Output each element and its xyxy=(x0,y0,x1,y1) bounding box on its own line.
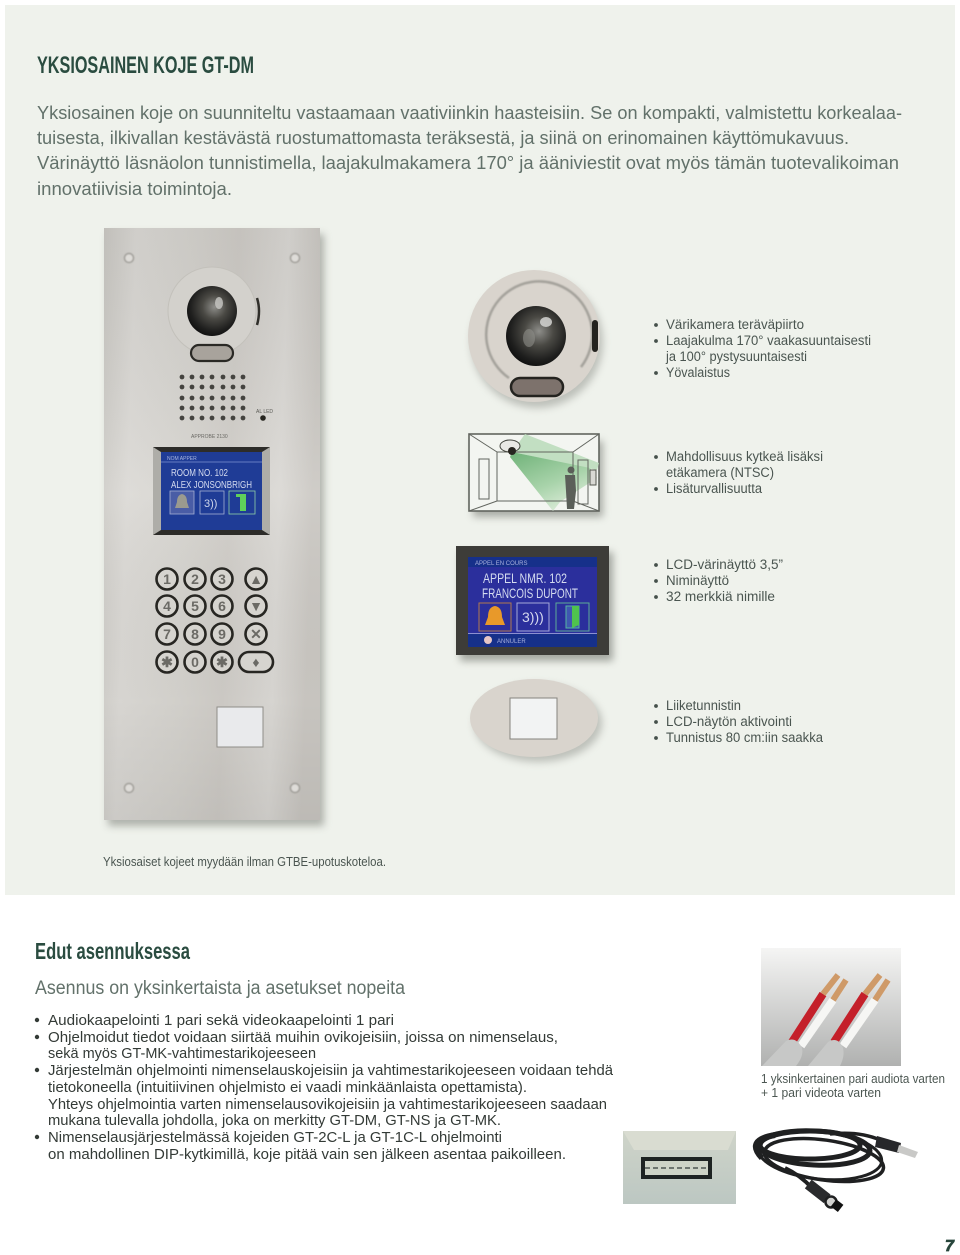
keypad labels: 5 xyxy=(191,598,199,614)
keypad labels xyxy=(161,571,263,670)
keypad labels: ♦ xyxy=(252,654,260,670)
installation heading: Edut asennuksessa xyxy=(35,938,190,964)
door station illustration xyxy=(104,228,324,826)
installation bullet list: Järjestelmän ohjelmointi nimenselauskojeisiin ja vahtimestarikojeeseen voidaan tehdä xyxy=(48,1063,614,1079)
keypad labels: 9 xyxy=(218,626,226,642)
LCD close-up: APPEL EN COURS xyxy=(475,561,527,567)
feature list: camera xyxy=(654,317,871,380)
keypad labels: 2 xyxy=(191,571,199,587)
installation bullet list xyxy=(35,1013,614,1163)
keypad labels: ▲ xyxy=(249,571,263,587)
installation subheading: Asennus on yksinkertaista ja asetukset nopeita xyxy=(35,978,405,999)
feature list: camera: Yövalaistus xyxy=(666,365,730,380)
keypad labels: 8 xyxy=(191,626,199,642)
LCD screen on station: NOM APPER xyxy=(167,456,197,462)
person silhouette xyxy=(565,466,576,509)
installation bullet list: mukana tulevalla johdolla, joka on merkitty GT-DM, GT-NS ja GT-MK. xyxy=(48,1113,501,1129)
installation bullet list: sekä myös GT-MK-vahtimestarikojeeseen xyxy=(48,1046,316,1062)
keypad labels: 7 xyxy=(163,626,171,642)
keypad labels: 3 xyxy=(218,571,226,587)
feature list: camera: Värikamera teräväpiirto xyxy=(666,317,804,332)
model label: APPROBE 2130 xyxy=(191,434,228,440)
bell icon xyxy=(479,603,511,631)
LCD screen on station: ROOM NO. 102 xyxy=(171,467,228,479)
keypad labels: ✕ xyxy=(250,626,262,642)
feature list: LCD: Niminäyttö xyxy=(666,573,729,588)
intro text block xyxy=(37,103,902,199)
LCD screen on station: 3)) xyxy=(204,498,217,510)
keypad labels: 4 xyxy=(163,598,171,614)
installation bullet list: Yhteys ohjelmointia varten nimenselausovikojeisiin ja vahtimestarikojeeseen saadaan xyxy=(48,1097,607,1113)
feature list: sensor: LCD-näytön aktivointi xyxy=(666,714,792,729)
wire caption: 1 yksinkertainen pari audiota varten xyxy=(761,1072,945,1086)
intro text block: Yksiosainen koje on suunniteltu vastaamaan vaativiinkin haasteisiin. Se on kompakti, valmistettu korkealaa- xyxy=(37,103,902,123)
LED indicator: AL LED xyxy=(256,409,273,415)
keypad xyxy=(156,568,273,672)
USB cable photo xyxy=(756,1125,918,1212)
LCD close-up: FRANCOIS DUPONT xyxy=(482,585,578,601)
caption: Yksiosaiset kojeet myydään ilman GTBE-upotuskoteloa. xyxy=(103,855,386,869)
installation bullet list: Audiokaapelointi 1 pari sekä videokaapelointi 1 pari xyxy=(48,1013,394,1029)
feature list: LCD xyxy=(654,557,783,604)
LCD close-up xyxy=(456,546,613,661)
keypad labels: ✱ xyxy=(161,654,173,670)
voice icon: 3))) xyxy=(522,609,544,625)
speaker grille xyxy=(180,375,245,420)
LCD close-up: ANNULER xyxy=(497,639,526,645)
feature list: sensor: Liiketunnistin xyxy=(666,698,741,713)
door icon xyxy=(556,603,589,631)
feature list: camera: Laajakulma 170° vaakasuuntaisesti xyxy=(666,333,871,348)
LCD screen on station xyxy=(153,447,270,535)
intro text block: innovatiivisia toimintoja. xyxy=(37,179,232,199)
feature list: sensor: Tunnistus 80 cm:iin saakka xyxy=(666,730,823,745)
page number: 7 xyxy=(945,1238,955,1255)
intro text block: Värinäyttö läsnäolon tunnistimella, laajakulmakamera 170° ja ääniviestit ovat myös tämän tuotevalikoiman xyxy=(37,153,899,173)
feature list: external camera: Mahdollisuus kytkeä lisäksi xyxy=(666,449,823,464)
LCD close-up: APPEL NMR. 102 xyxy=(483,570,567,586)
installation bullet list: tietokoneella (intuitiivinen ohjelmisto ei vaadi minkäänlaista opettamista). xyxy=(48,1080,527,1096)
feature list: LCD: 32 merkkiä nimille xyxy=(666,589,775,604)
DIP switch photo xyxy=(623,1131,736,1204)
intro text block: tuisesta, ilkivallan kestävästä ruostumattomasta teräksestä, ja siinä on erinomainen käyttömukavuus. xyxy=(37,128,849,148)
presence sensor window xyxy=(217,707,263,747)
wire caption: + 1 pari videota varten xyxy=(761,1086,881,1100)
installation bullet list: Ohjelmoidut tiedot voidaan siirtää muihin ovikojeisiin, joissa on nimenselaus, xyxy=(48,1030,558,1046)
keypad labels: 0 xyxy=(191,654,199,670)
dome camera xyxy=(500,440,520,455)
installation bullet list: on mahdollinen DIP-kytkimillä, koje pitää vain sen jälkeen asentaa paikoilleen. xyxy=(48,1147,566,1163)
keypad labels: ✱ xyxy=(216,654,228,670)
camera close-up xyxy=(468,270,603,408)
feature list: LCD: LCD-värinäyttö 3,5” xyxy=(666,557,783,572)
feature list: external camera: etäkamera (NTSC) xyxy=(666,465,774,480)
feature list: external camera: Lisäturvallisuutta xyxy=(666,481,762,496)
keypad labels: 6 xyxy=(218,598,226,614)
LCD screen on station: ALEX JONSONBRIGH xyxy=(171,479,252,491)
camera module xyxy=(168,267,259,361)
screws xyxy=(124,254,300,792)
voice icon xyxy=(517,603,549,631)
feature list: sensor xyxy=(654,698,823,745)
keypad labels: ▼ xyxy=(249,598,263,614)
wire caption xyxy=(761,1072,945,1100)
LED indicator xyxy=(256,409,273,421)
wire photo xyxy=(761,948,901,1066)
room coverage diagram xyxy=(469,434,603,517)
keypad labels: 1 xyxy=(163,571,171,587)
feature list: camera: ja 100° pystysuuntaisesti xyxy=(665,349,807,364)
title: YKSIOSAINEN KOJE GT-DM xyxy=(37,52,254,79)
feature list: external camera xyxy=(654,449,823,496)
panel: product background xyxy=(5,5,955,895)
presence sensor close-up xyxy=(470,679,602,762)
installation bullet list: Nimenselausjärjestelmässä kojeiden GT-2C-L ja GT-1C-L ohjelmointi xyxy=(48,1130,502,1146)
